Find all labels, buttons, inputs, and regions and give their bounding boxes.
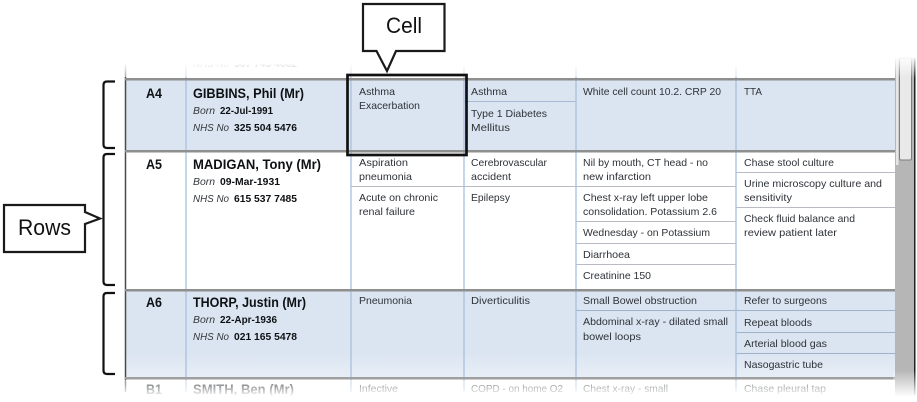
row A5: sensitivity — [744, 192, 793, 204]
patient details A6: THORP, Justin (Mr) — [193, 295, 306, 310]
patient details A5: MADIGAN, Tony (Mr) — [193, 157, 321, 172]
row A5: accident — [471, 171, 511, 183]
bracket: row A4 — [104, 82, 115, 148]
row A5: Cerebrovascular — [471, 157, 547, 169]
row A5: Wednesday - on Potassium — [583, 227, 710, 239]
bottom fade — [120, 370, 917, 402]
partial row B1: Chest x-ray - small — [583, 383, 668, 395]
row A5: Check fluid balance and — [744, 213, 855, 225]
row A5: Aspiration — [359, 157, 408, 169]
cell highlight box — [348, 75, 466, 155]
row A6: Nasogastric tube — [744, 359, 823, 371]
row A5 — [146, 157, 882, 282]
row A5: Epilepsy — [471, 192, 511, 204]
row A5: new infarction — [583, 171, 651, 183]
patient details A4: NHS No — [193, 123, 229, 134]
row A5: renal failure — [359, 206, 415, 218]
patient details A5: NHS No — [193, 194, 229, 205]
patient details A5 — [193, 157, 321, 205]
callout: Rows — [4, 205, 100, 252]
row A5: review patient later — [744, 227, 838, 239]
row A4: Exacerbation — [359, 100, 420, 112]
partial row above A4 — [193, 59, 297, 70]
scrollbar — [895, 58, 916, 398]
callout: Cell: Cell — [386, 13, 422, 38]
partial row B1: Chase pleural tap — [744, 383, 826, 395]
row A5: Chase stool culture — [744, 157, 834, 169]
row A6: Pneumonia — [359, 295, 412, 307]
partial row B1: COPD - on home O2 — [471, 383, 563, 395]
panel: patient table — [120, 50, 917, 402]
row A6: A6 — [146, 295, 162, 310]
row A6: Diverticulitis — [471, 295, 530, 307]
partial row B1 — [146, 382, 826, 397]
row A5: Creatinine 150 — [583, 270, 651, 282]
bracket: row A5 — [104, 154, 115, 285]
row A5: pneumonia — [359, 171, 412, 183]
partial row B1: SMITH, Ben (Mr) — [193, 382, 294, 397]
row A4 — [146, 86, 762, 134]
row separators — [125, 78, 895, 380]
row A5: consolidation. Potassium 2.6 — [583, 206, 717, 218]
row A4: Mellitus — [471, 122, 510, 134]
patient details A6: NHS No — [193, 332, 229, 343]
row A6: Abdominal x-ray - dilated small — [583, 316, 728, 328]
row A4: White cell count 10.2. CRP 20 — [583, 86, 721, 98]
row A5: Acute on chronic — [359, 192, 438, 204]
row A5: Urine microscopy culture and — [744, 178, 882, 190]
callout: Cell — [363, 4, 444, 71]
callout: Rows: Rows — [18, 215, 71, 240]
row A4: TTA — [744, 86, 762, 98]
top fade — [120, 50, 890, 77]
partial row above A4: NHS No — [193, 59, 229, 70]
row A5: Diarrhoea — [583, 249, 630, 261]
patient details A5: 615 537 7485 — [234, 194, 297, 205]
patient details A6: Born — [193, 315, 215, 326]
patient details A4: GIBBINS, Phil (Mr) — [193, 86, 304, 101]
patient details A4 — [193, 86, 304, 134]
patient details A4: Born — [193, 106, 215, 117]
row backgrounds — [125, 79, 895, 378]
row A5: Chest x-ray left upper lobe — [583, 192, 708, 204]
scrollbar top fade — [890, 56, 917, 78]
partial row above A4: 507 745 4662 — [234, 59, 297, 70]
row A6: Refer to surgeons — [744, 295, 827, 307]
row A6: bowel loops — [583, 331, 641, 343]
patient details A4: 22-Jul-1991 — [220, 106, 273, 117]
row A5: A5 — [146, 157, 162, 172]
patient details A5: 09-Mar-1931 — [220, 177, 280, 188]
patient details A6: 22-Apr-1936 — [220, 315, 277, 326]
row A4: Asthma — [359, 86, 395, 98]
patient details A5: Born — [193, 177, 215, 188]
row A6: Small Bowel obstruction — [583, 295, 697, 307]
table left edge — [124, 60, 126, 392]
row A5: Nil by mouth, CT head - no — [583, 157, 708, 169]
partial row B1: Infective — [359, 383, 398, 395]
patient details A4: 325 504 5476 — [234, 123, 297, 134]
bracket: row A6 — [104, 293, 115, 374]
partial row B1: B1 — [146, 382, 162, 397]
row A4: Asthma — [471, 86, 507, 98]
patient details A6 — [193, 295, 306, 343]
row A4: Type 1 Diabetes — [471, 108, 547, 120]
row A6: Arterial blood gas — [744, 338, 827, 350]
column lines — [186, 60, 736, 392]
row A6 — [146, 295, 827, 371]
row A6: Repeat bloods — [744, 317, 812, 329]
row A4: A4 — [146, 86, 162, 101]
patient details A6: 021 165 5478 — [234, 332, 297, 343]
cell dividers — [351, 102, 895, 354]
